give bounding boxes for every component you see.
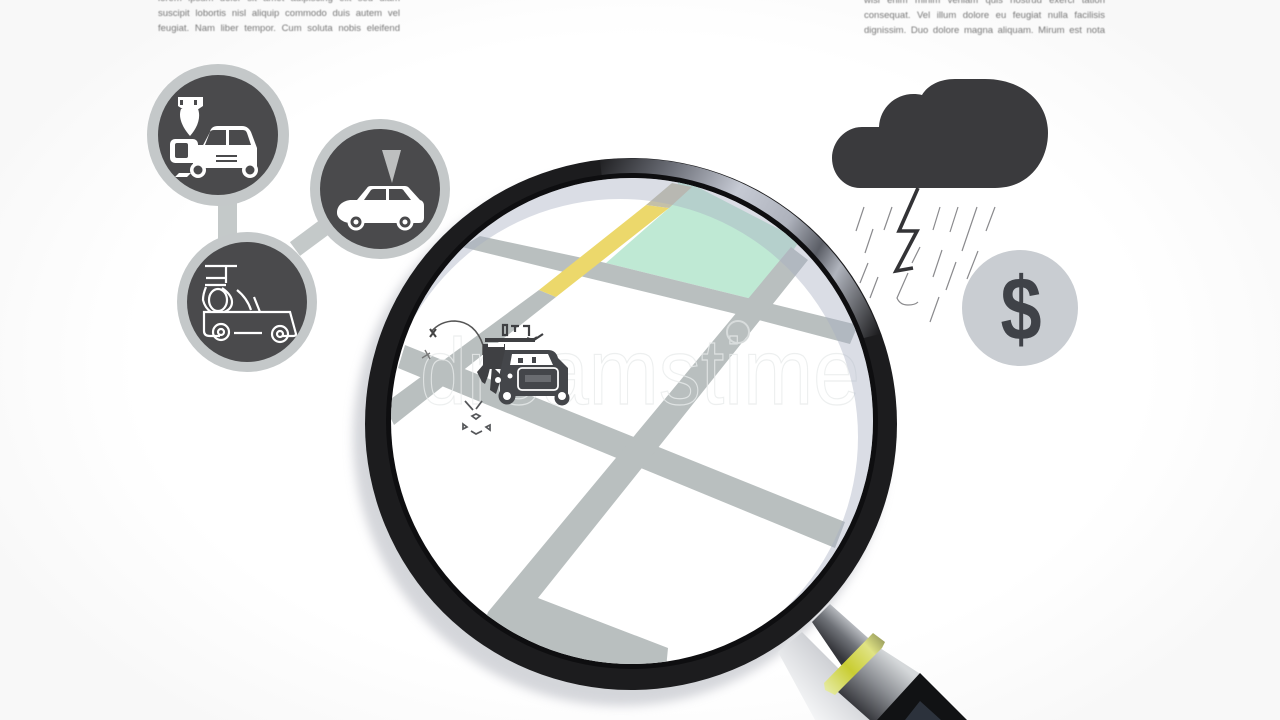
text block: top right: dignissim. Duo dolore magna aliquam. Mirum est nota <box>864 25 1105 36</box>
magnifying glass lens <box>365 158 897 690</box>
map <box>391 178 873 664</box>
text block: top right <box>864 0 1106 36</box>
road: long diagonal and bottom block <box>487 247 808 664</box>
watermark: dreamstime <box>420 319 860 424</box>
icon: tow truck outline circle <box>177 232 317 372</box>
cloud <box>832 79 1048 188</box>
handle shadow <box>778 632 890 720</box>
text block: top left: suscipit lobortis nisl aliquip commodo duis autem vel <box>158 8 400 19</box>
icon: side view car circle <box>310 119 450 259</box>
road: diagonal left <box>384 290 556 425</box>
road: lower cross street <box>398 345 845 548</box>
icon: dollar coin <box>962 250 1078 366</box>
icon: dollar coin: $ <box>1000 260 1042 360</box>
road: upper cross street <box>462 236 858 344</box>
yellow ring <box>824 633 885 695</box>
text block: top left: feugiat. Nam liber tempor. Cum soluta nobis eleifend <box>158 23 400 34</box>
black grip <box>877 673 967 720</box>
icon: storm cloud <box>832 79 1048 322</box>
green park <box>606 178 800 300</box>
road: yellow section <box>539 205 669 297</box>
text block: top right: consequat. Vel illum dolore eu feugiat nulla facilisis <box>864 10 1105 21</box>
text block: top left <box>158 0 400 34</box>
rain <box>856 207 995 322</box>
magnifying glass shadow <box>353 170 889 706</box>
metal rim highlight <box>600 158 880 340</box>
icon: collision circle <box>147 64 289 206</box>
icon: crashed car <box>422 321 570 434</box>
connector: circles 1 and 3 <box>218 198 237 240</box>
lightning bolt <box>896 188 918 271</box>
metal neck <box>812 604 876 672</box>
connector: circles 3 and 2 <box>295 226 326 249</box>
icon: warning cone <box>382 150 401 183</box>
inner black line <box>386 173 878 669</box>
magnifying glass handle <box>778 604 967 720</box>
glass reflection <box>414 178 873 610</box>
